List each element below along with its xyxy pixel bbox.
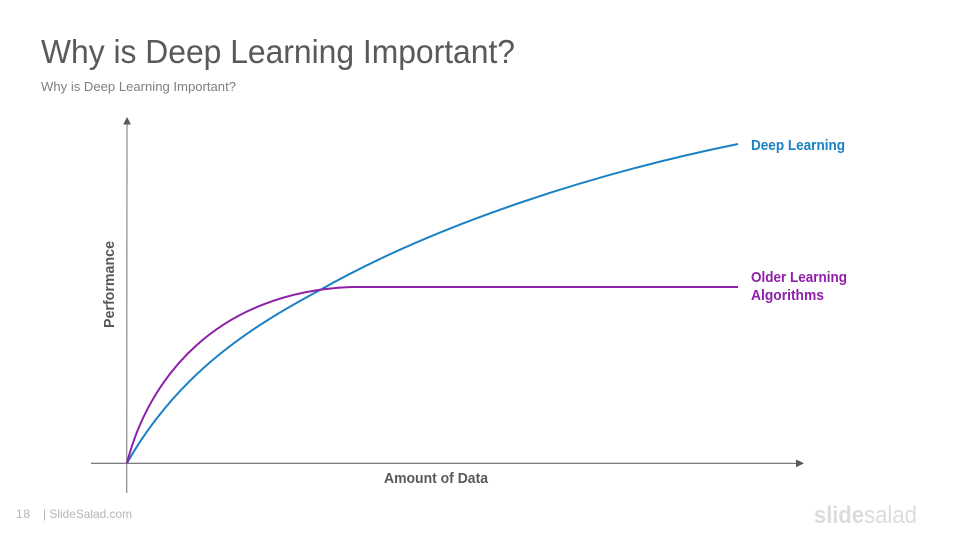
label: deep learning: Deep Learning: [751, 137, 845, 154]
title: Why is Deep Learning Important?: [41, 33, 515, 70]
page number: 18: [16, 507, 30, 521]
logo wordmark: salad: [864, 502, 917, 529]
curve: deep learning: [127, 144, 738, 463]
label: older learning algorithms: Older Learning: [751, 269, 847, 286]
curve: older learning algorithms: [127, 287, 738, 463]
x axis arrow: [91, 460, 804, 467]
y axis label: Performance: [101, 241, 118, 328]
x axis label: Amount of Data: [384, 470, 489, 487]
subtitle: Why is Deep Learning Important?: [41, 80, 236, 94]
logo wordmark: slide: [814, 502, 864, 529]
footer source: | SlideSalad.com: [43, 507, 132, 521]
y axis arrow: [123, 117, 131, 493]
label: older learning algorithms: Algorithms: [751, 287, 824, 304]
chart: performance vs amount of data: [91, 117, 847, 493]
